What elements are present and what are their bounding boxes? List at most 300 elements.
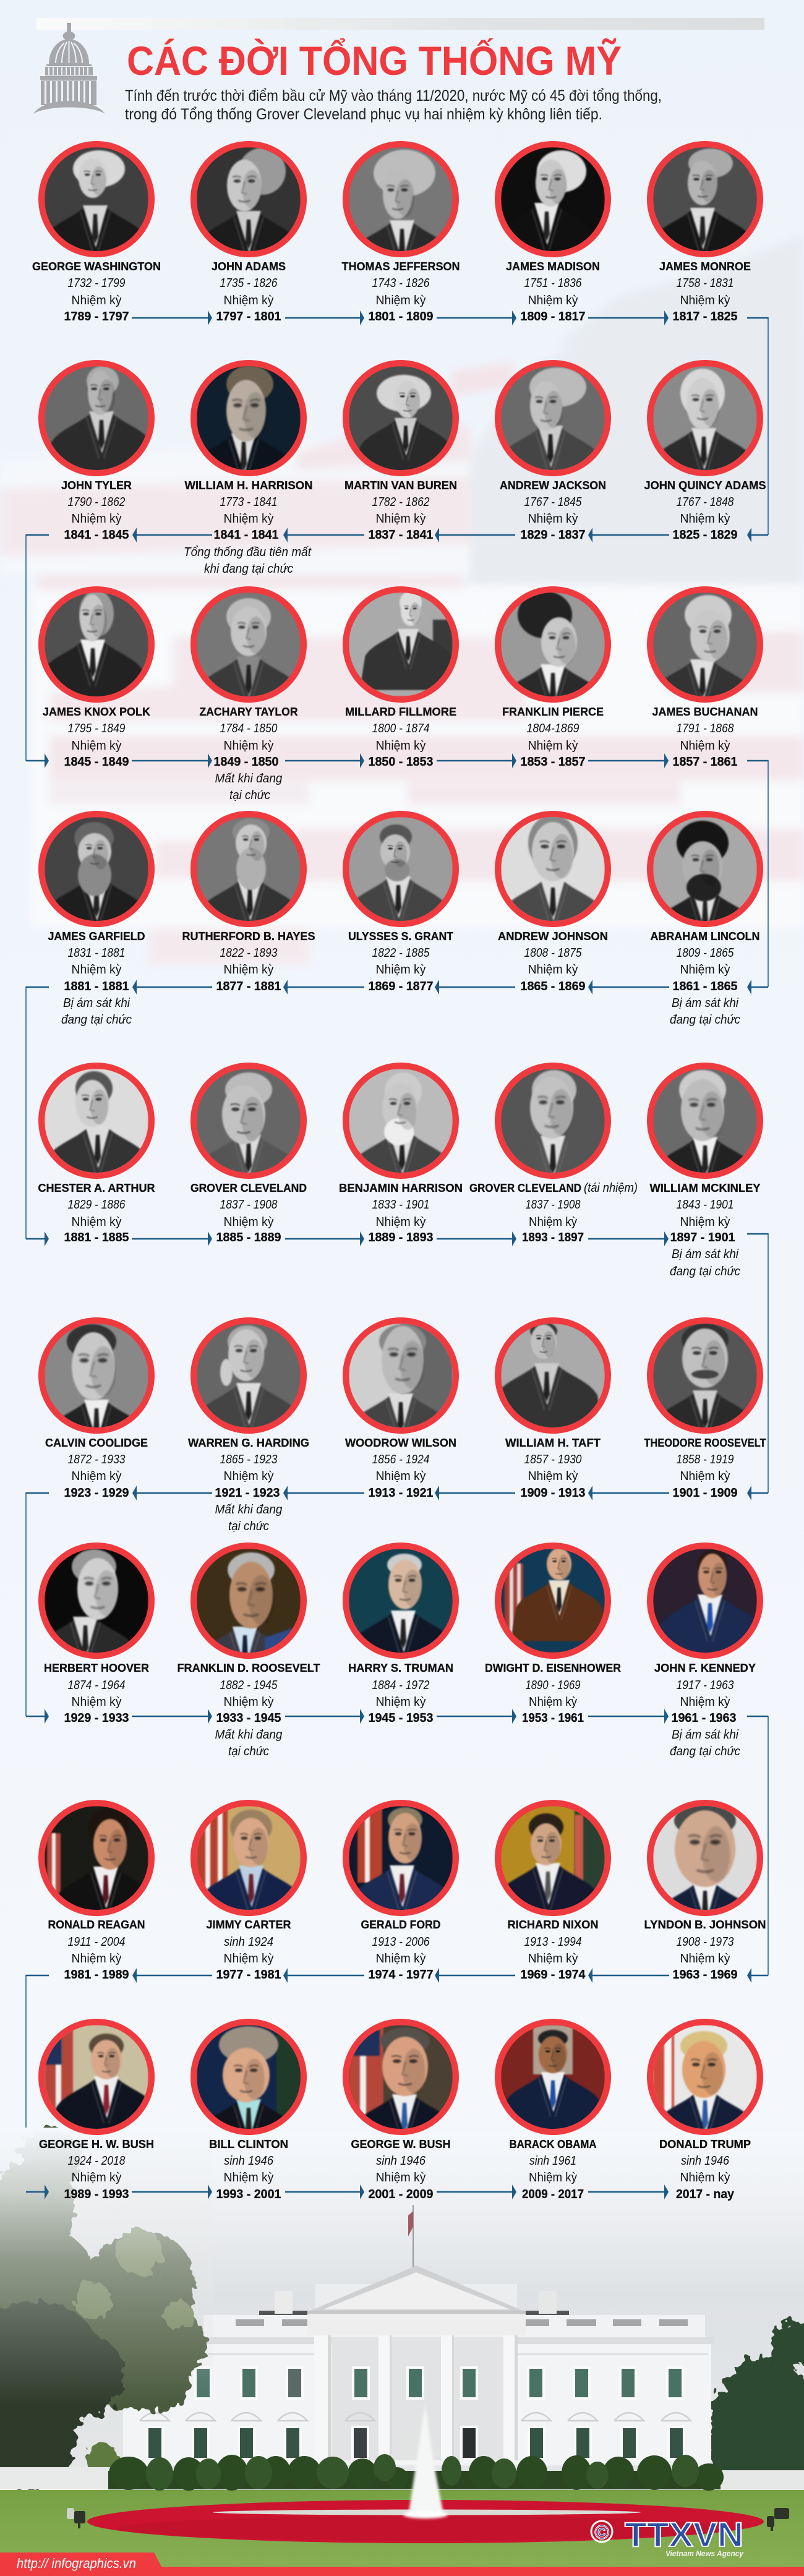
- president: James Buchanan: [646, 586, 763, 769]
- term: 1797 - 1801: [216, 310, 281, 323]
- name: THEODORE ROOSEVELT: [644, 1436, 766, 1449]
- years: 1782 - 1862: [372, 495, 429, 509]
- term: 1877 - 1881: [216, 980, 281, 993]
- president: William H. Harrison: [184, 360, 313, 576]
- term: 1817 - 1825: [673, 310, 737, 323]
- name: ANDREW JACKSON: [500, 479, 606, 492]
- term label: Nhiệm kỳ: [376, 1951, 426, 1966]
- TTXVN logo: TTXVN: [625, 2515, 743, 2554]
- years: 1857 - 1930: [524, 1453, 581, 1466]
- years: sinh 1946: [681, 2154, 730, 2168]
- portrait: [38, 1317, 155, 1471]
- term: 1993 - 2001: [216, 2188, 281, 2201]
- name: JAMES KNOX POLK: [43, 705, 151, 718]
- years: 1767 - 1845: [524, 495, 582, 509]
- term: 2017 - nay: [676, 2188, 735, 2201]
- upper windows: [195, 2368, 683, 2398]
- president: George W. Bush: [343, 2019, 461, 2201]
- portrait: [190, 811, 307, 951]
- term label: Nhiệm kỳ: [224, 293, 274, 307]
- portrait: [647, 360, 763, 476]
- grey top bar: [36, 18, 764, 30]
- years: 1837 - 1908: [526, 1198, 580, 1212]
- term label: Nhiệm kỳ: [680, 511, 730, 526]
- name: MILLARD FILLMORE: [345, 705, 456, 718]
- note: [215, 1728, 282, 1758]
- footer bar: [0, 2552, 804, 2576]
- president: Herbert Hoover: [28, 1543, 155, 1725]
- years: 1890 - 1969: [526, 1679, 580, 1692]
- term: 1963 - 1969: [673, 1968, 737, 1982]
- name: WILLIAM H. TAFT: [505, 1436, 601, 1449]
- term: 1849 - 1850: [214, 755, 278, 769]
- president: William McKinley: [647, 1063, 763, 1278]
- term label: Nhiệm kỳ: [528, 1951, 578, 1966]
- name: THOMAS JEFFERSON: [341, 260, 460, 273]
- note: [215, 1503, 282, 1533]
- term label: Nhiệm kỳ: [224, 1951, 274, 1966]
- tree fog: [0, 2128, 213, 2406]
- years: 1735 - 1826: [220, 276, 278, 290]
- term label: Nhiệm kỳ: [224, 2170, 274, 2184]
- term label: Nhiệm kỳ: [376, 1695, 426, 1709]
- term: 1869 - 1877: [369, 980, 433, 993]
- note: [670, 1728, 740, 1758]
- name: JAMES MONROE: [659, 260, 751, 273]
- name: BILL CLINTON: [209, 2137, 288, 2150]
- president: Donald Trump: [647, 2019, 763, 2201]
- term label: Nhiệm kỳ: [376, 1469, 426, 1483]
- name: GERALD FORD: [361, 1918, 440, 1931]
- term label: Nhiệm kỳ: [680, 1951, 730, 1966]
- term: 2009 - 2017: [522, 2188, 584, 2201]
- portrait: [495, 2019, 611, 2140]
- president: Andrew Johnson: [495, 811, 611, 993]
- term: 1981 - 1989: [64, 1968, 129, 1982]
- timeline row 6 arrows: [26, 1486, 768, 1716]
- name: RONALD REAGAN: [48, 1918, 145, 1931]
- portrait: [190, 141, 307, 257]
- term label: Nhiệm kỳ: [72, 962, 122, 977]
- president: John Tyler: [38, 360, 158, 542]
- president: James Garfield: [38, 811, 155, 1027]
- lawn: [0, 2490, 804, 2576]
- term label: Nhiệm kỳ: [528, 1469, 578, 1483]
- term: 1893 - 1897: [522, 1231, 584, 1244]
- term: 1845 - 1849: [64, 755, 129, 769]
- intro text: [125, 87, 662, 123]
- faded flag background: [0, 235, 804, 965]
- term label: Nhiệm kỳ: [72, 738, 122, 753]
- term label: Nhiệm kỳ: [528, 962, 578, 977]
- years: sinh 1946: [376, 2154, 426, 2168]
- name: JOHN ADAMS: [212, 260, 286, 273]
- term label: Nhiệm kỳ: [376, 1215, 426, 1229]
- president: Millard Fillmore: [343, 586, 459, 769]
- president: Franklin D. Roosevelt: [177, 1543, 320, 1758]
- title: CÁC ĐỜI TỔNG THỐNG MỸ: [127, 38, 622, 83]
- term: 1885 - 1889: [216, 1231, 281, 1244]
- timeline row 1 arrows: [132, 310, 768, 535]
- TTXVN logo: ©: [594, 2521, 609, 2543]
- name: FRANKLIN D. ROOSEVELT: [177, 1661, 320, 1674]
- term label: Nhiệm kỳ: [529, 1215, 578, 1229]
- name: JAMES BUCHANAN: [652, 705, 758, 718]
- flower bed: [87, 2500, 764, 2543]
- years: 1911 - 2004: [68, 1935, 125, 1949]
- president: Chester A. Arthur: [38, 1063, 155, 1244]
- term label: Nhiệm kỳ: [528, 293, 578, 307]
- years: 1773 - 1841: [220, 495, 277, 509]
- garden lights: [67, 2508, 789, 2531]
- portrait: [190, 586, 307, 703]
- term: 1953 - 1961: [522, 1711, 584, 1725]
- timeline row 7 arrows: [26, 1709, 768, 1975]
- president: Zachary Taylor: [190, 586, 307, 802]
- term: 2001 - 2009: [369, 2188, 433, 2201]
- president: James Knox Polk: [36, 586, 155, 769]
- president: James Madison: [490, 141, 611, 323]
- name: JOHN TYLER: [61, 479, 132, 492]
- president: Ronald Reagan: [38, 1800, 163, 1982]
- note: tại chức: [229, 789, 270, 802]
- president: Warren G. Harding: [188, 1317, 309, 1533]
- name: HARRY S. TRUMAN: [348, 1661, 453, 1674]
- hedge bushes: [108, 2454, 724, 2491]
- years: 1874 - 1964: [68, 1679, 125, 1692]
- note: [215, 772, 282, 802]
- years: 1917 - 1963: [677, 1679, 733, 1692]
- years: 1809 - 1865: [677, 946, 734, 960]
- president: Barack Obama: [495, 2019, 611, 2201]
- term label: Nhiệm kỳ: [680, 1695, 730, 1709]
- term label: Nhiệm kỳ: [72, 1469, 122, 1483]
- years: 1743 - 1826: [372, 276, 430, 290]
- president: John F. Kennedy: [647, 1543, 767, 1758]
- name: WARREN G. HARDING: [188, 1436, 309, 1449]
- term label: Nhiệm kỳ: [224, 1215, 274, 1229]
- note: Mất khi đang: [215, 1503, 282, 1517]
- term label: Nhiệm kỳ: [376, 962, 426, 977]
- years: 1822 - 1893: [220, 946, 277, 960]
- term: 1921 - 1923: [215, 1486, 280, 1500]
- portrait: [343, 1063, 459, 1204]
- years: 1837 - 1908: [220, 1198, 277, 1212]
- term: 1897 - 1901: [670, 1231, 735, 1244]
- years: 1800 - 1874: [372, 722, 429, 735]
- years: 1833 - 1901: [372, 1198, 429, 1212]
- president: Dwight D. Eisenhower: [485, 1543, 621, 1725]
- note: đang tại chức: [670, 1265, 740, 1278]
- president: Woodrow Wilson: [343, 1317, 459, 1500]
- portrait: [38, 811, 155, 951]
- term label: Nhiệm kỳ: [72, 293, 122, 307]
- name: DWIGHT D. EISENHOWER: [485, 1661, 621, 1674]
- president: Lyndon B. Johnson: [644, 1800, 766, 1982]
- term label: Nhiệm kỳ: [680, 738, 730, 753]
- term label: Nhiệm kỳ: [528, 511, 578, 526]
- president: Thomas Jefferson: [341, 141, 460, 323]
- president: Abraham Lincoln: [647, 811, 763, 1027]
- portrait: [647, 141, 763, 257]
- president: Martin Van Buren: [343, 360, 459, 542]
- term: 1933 - 1945: [216, 1711, 281, 1725]
- note: [670, 1247, 740, 1278]
- president: Jimmy Carter: [190, 1800, 308, 1982]
- term: 1974 - 1977: [369, 1968, 433, 1982]
- term: 1929 - 1933: [64, 1711, 129, 1725]
- years: 1843 - 1901: [677, 1198, 733, 1212]
- years: 1872 - 1933: [68, 1453, 125, 1466]
- timeline row 9 arrows: [26, 2184, 669, 2199]
- term: 1889 - 1893: [369, 1231, 433, 1244]
- term label: Nhiệm kỳ: [529, 1695, 578, 1709]
- term: 1909 - 1913: [521, 1486, 585, 1500]
- timeline row 3 arrows: [26, 753, 768, 987]
- portrait: [495, 586, 611, 736]
- flag pole: [408, 2205, 414, 2267]
- term: 1881 - 1881: [64, 980, 129, 993]
- portrait: [38, 1063, 155, 1198]
- president: John Quincy Adams: [644, 360, 766, 542]
- president: Benjamin Harrison: [339, 1063, 463, 1244]
- name: [469, 1181, 638, 1195]
- portrait: [343, 141, 459, 257]
- term label: Nhiệm kỳ: [72, 1695, 122, 1709]
- portrait: [343, 1317, 459, 1465]
- footer bar: http:// infographics.vn: [17, 2556, 136, 2571]
- term: 1850 - 1853: [369, 755, 433, 769]
- term: 1881 - 1885: [64, 1231, 129, 1244]
- name: GEORGE WASHINGTON: [32, 260, 161, 273]
- portrait: [647, 1063, 763, 1209]
- portrait: [343, 586, 459, 703]
- name: BARACK OBAMA: [510, 2137, 596, 2150]
- name: ABRAHAM LINCOLN: [651, 930, 759, 943]
- term: 1829 - 1837: [521, 528, 585, 542]
- header: [33, 18, 764, 123]
- timeline row 5 arrows: [26, 1231, 768, 1493]
- portrait: [647, 1800, 763, 1954]
- president: Andrew Jackson: [494, 360, 611, 542]
- name: WILLIAM H. HARRISON: [184, 479, 313, 492]
- term label: Nhiệm kỳ: [72, 2170, 122, 2184]
- lower windows: [147, 2427, 684, 2459]
- name: BENJAMIN HARRISON: [339, 1181, 463, 1194]
- name: FRANKLIN PIERCE: [502, 705, 604, 718]
- portrait: [28, 1543, 155, 1688]
- name: RICHARD NIXON: [507, 1918, 599, 1931]
- name: MARTIN VAN BUREN: [344, 479, 457, 492]
- portrait: [343, 2019, 461, 2166]
- president: Gerald Ford: [343, 1800, 459, 1982]
- portico: [331, 2337, 503, 2460]
- portrait: [343, 360, 459, 482]
- years: 1831 - 1881: [68, 946, 125, 960]
- term label: Nhiệm kỳ: [72, 511, 122, 526]
- name: ZACHARY TAYLOR: [199, 705, 298, 718]
- name: JOHN F. KENNEDY: [654, 1661, 756, 1674]
- term label: Nhiệm kỳ: [224, 738, 274, 753]
- portrait: [495, 1063, 611, 1207]
- years: 1804-1869: [527, 722, 579, 735]
- note: khi đang tại chức: [204, 562, 293, 576]
- portrait: [647, 1543, 767, 1666]
- intro text: trong đó Tổng thống Grover Cleveland phục vụ hai nhiệm kỳ không liên tiếp.: [125, 106, 602, 123]
- name: CALVIN COOLIDGE: [45, 1436, 148, 1449]
- years: 1790 - 1862: [68, 495, 125, 509]
- years: 1865 - 1923: [220, 1453, 277, 1466]
- name: ULYSSES S. GRANT: [348, 930, 454, 943]
- note: tại chức: [228, 1745, 269, 1758]
- icon: capitol dome: [33, 23, 105, 114]
- name: GEORGE W. BUSH: [351, 2137, 450, 2150]
- president: Richard Nixon: [491, 1800, 611, 1982]
- years: 1856 - 1924: [372, 1453, 429, 1466]
- years: 1732 - 1799: [68, 276, 125, 290]
- left tree: [0, 2128, 205, 2489]
- name: JOHN QUINCY ADAMS: [644, 479, 766, 492]
- years: 1791 - 1868: [677, 722, 733, 735]
- portrait: [190, 2019, 307, 2171]
- president: Theodore Roosevelt: [644, 1317, 766, 1500]
- note: đang tại chức: [670, 1013, 740, 1027]
- name: GEORGE H. W. BUSH: [39, 2137, 154, 2150]
- years: 1808 - 1875: [524, 946, 582, 960]
- note: [61, 996, 132, 1027]
- portrait: [495, 141, 611, 257]
- term: 1989 - 1993: [64, 2188, 129, 2201]
- years: sinh 1946: [224, 2154, 274, 2168]
- term label: Nhiệm kỳ: [72, 1215, 122, 1229]
- portrait: [38, 2019, 163, 2148]
- sky: [0, 2134, 804, 2486]
- note: đang tại chức: [61, 1013, 132, 1027]
- portrait: [38, 1800, 163, 1938]
- term: 1861 - 1865: [673, 980, 737, 993]
- name: ANDREW JOHNSON: [498, 930, 608, 943]
- note: [670, 996, 740, 1027]
- name: GROVER CLEVELAND: [469, 1181, 581, 1194]
- note: Tổng thống đầu tiên mất: [184, 546, 312, 559]
- years: 1913 - 1994: [524, 1935, 581, 1949]
- president: Harry S. Truman: [343, 1543, 460, 1725]
- president: Rutherford B. Hayes: [182, 811, 315, 993]
- portrait: [647, 811, 763, 963]
- name: WOODROW WILSON: [345, 1436, 456, 1449]
- name: JIMMY CARTER: [207, 1918, 291, 1931]
- years: 1908 - 1973: [677, 1935, 733, 1949]
- term label: Nhiệm kỳ: [72, 1951, 122, 1966]
- president: Calvin Coolidge: [38, 1317, 155, 1500]
- term label: Nhiệm kỳ: [680, 962, 730, 977]
- term label: Nhiệm kỳ: [376, 511, 426, 526]
- term label: Nhiệm kỳ: [224, 1695, 274, 1709]
- years: 1858 - 1919: [677, 1453, 733, 1466]
- term: 1923 - 1929: [64, 1486, 129, 1500]
- years: 1913 - 2006: [372, 1935, 430, 1949]
- president: George H. W. Bush: [38, 2019, 163, 2201]
- years: 1882 - 1945: [220, 1679, 278, 1692]
- portrait: [38, 360, 158, 483]
- term: 1841 - 1841: [214, 528, 278, 542]
- term: 1969 - 1974: [521, 1968, 586, 1982]
- term: 1901 - 1909: [673, 1486, 737, 1500]
- TTXVN logo: Vietnam News Agency: [665, 2549, 744, 2558]
- term label: Nhiệm kỳ: [376, 738, 426, 753]
- president: Grover Cleveland: [190, 1063, 307, 1244]
- term: 1789 - 1797: [64, 310, 129, 323]
- president: Franklin Pierce: [495, 586, 611, 769]
- name: HERBERT HOOVER: [44, 1661, 149, 1674]
- name: DONALD TRUMP: [659, 2137, 751, 2150]
- president: Ulysses S. Grant: [341, 811, 459, 993]
- president: James Monroe: [646, 141, 763, 323]
- years: 1884 - 1972: [372, 1679, 429, 1692]
- term: 1865 - 1869: [521, 980, 585, 993]
- portrait: [343, 1543, 460, 1682]
- portrait: [647, 1317, 763, 1462]
- portrait: [190, 1063, 307, 1206]
- term label: Nhiệm kỳ: [680, 2170, 730, 2184]
- years: 1767 - 1848: [677, 495, 733, 509]
- portrait: [190, 1800, 308, 1937]
- term: 1961 - 1963: [672, 1711, 736, 1725]
- name: (tái nhiệm): [584, 1181, 638, 1195]
- term: 1945 - 1953: [369, 1711, 433, 1725]
- portrait: [188, 1543, 307, 1698]
- note: Bị ám sát khi: [672, 996, 739, 1010]
- timeline row 8 arrows: [26, 1968, 768, 2192]
- years: 1822 - 1885: [372, 946, 430, 960]
- term label: Nhiệm kỳ: [529, 2170, 578, 2184]
- term label: Nhiệm kỳ: [680, 1469, 730, 1483]
- term label: Nhiệm kỳ: [224, 511, 274, 526]
- term: 1801 - 1809: [369, 310, 433, 323]
- term: 1841 - 1845: [64, 528, 129, 542]
- years: sinh 1924: [224, 1935, 273, 1949]
- portrait: [190, 1317, 307, 1455]
- portrait: [495, 811, 611, 951]
- portrait: [36, 586, 155, 711]
- years: 1751 - 1836: [524, 276, 582, 290]
- note: Mất khi đang: [215, 772, 282, 785]
- name: RUTHERFORD B. HAYES: [182, 930, 315, 943]
- years: 1829 - 1886: [68, 1198, 126, 1212]
- name: JAMES MADISON: [506, 260, 600, 273]
- name: JAMES GARFIELD: [48, 930, 145, 943]
- president: Bill Clinton: [190, 2019, 307, 2201]
- White House scene: [0, 2128, 804, 2576]
- note: đang tại chức: [670, 1745, 740, 1758]
- portrait: [491, 1800, 611, 1935]
- portrait: [38, 141, 155, 257]
- note: tại chức: [228, 1520, 269, 1533]
- timeline row 2 arrows: [26, 528, 768, 761]
- term: 1837 - 1841: [369, 528, 433, 542]
- portrait: [341, 811, 459, 948]
- term: 1977 - 1981: [216, 1968, 281, 1982]
- term label: Nhiệm kỳ: [224, 1469, 274, 1483]
- note: Bị ám sát khi: [672, 1728, 739, 1742]
- portrait: [495, 360, 611, 476]
- note: Bị ám sát khi: [63, 996, 130, 1010]
- years: 1784 - 1850: [220, 722, 277, 735]
- intro text: Tính đến trước thời điểm bầu cử Mỹ vào tháng 11/2020, nước Mỹ có 45 đời tổng thống,: [125, 87, 662, 105]
- portrait: [647, 2019, 763, 2163]
- term: 1825 - 1829: [673, 528, 737, 542]
- portrait: [646, 586, 763, 731]
